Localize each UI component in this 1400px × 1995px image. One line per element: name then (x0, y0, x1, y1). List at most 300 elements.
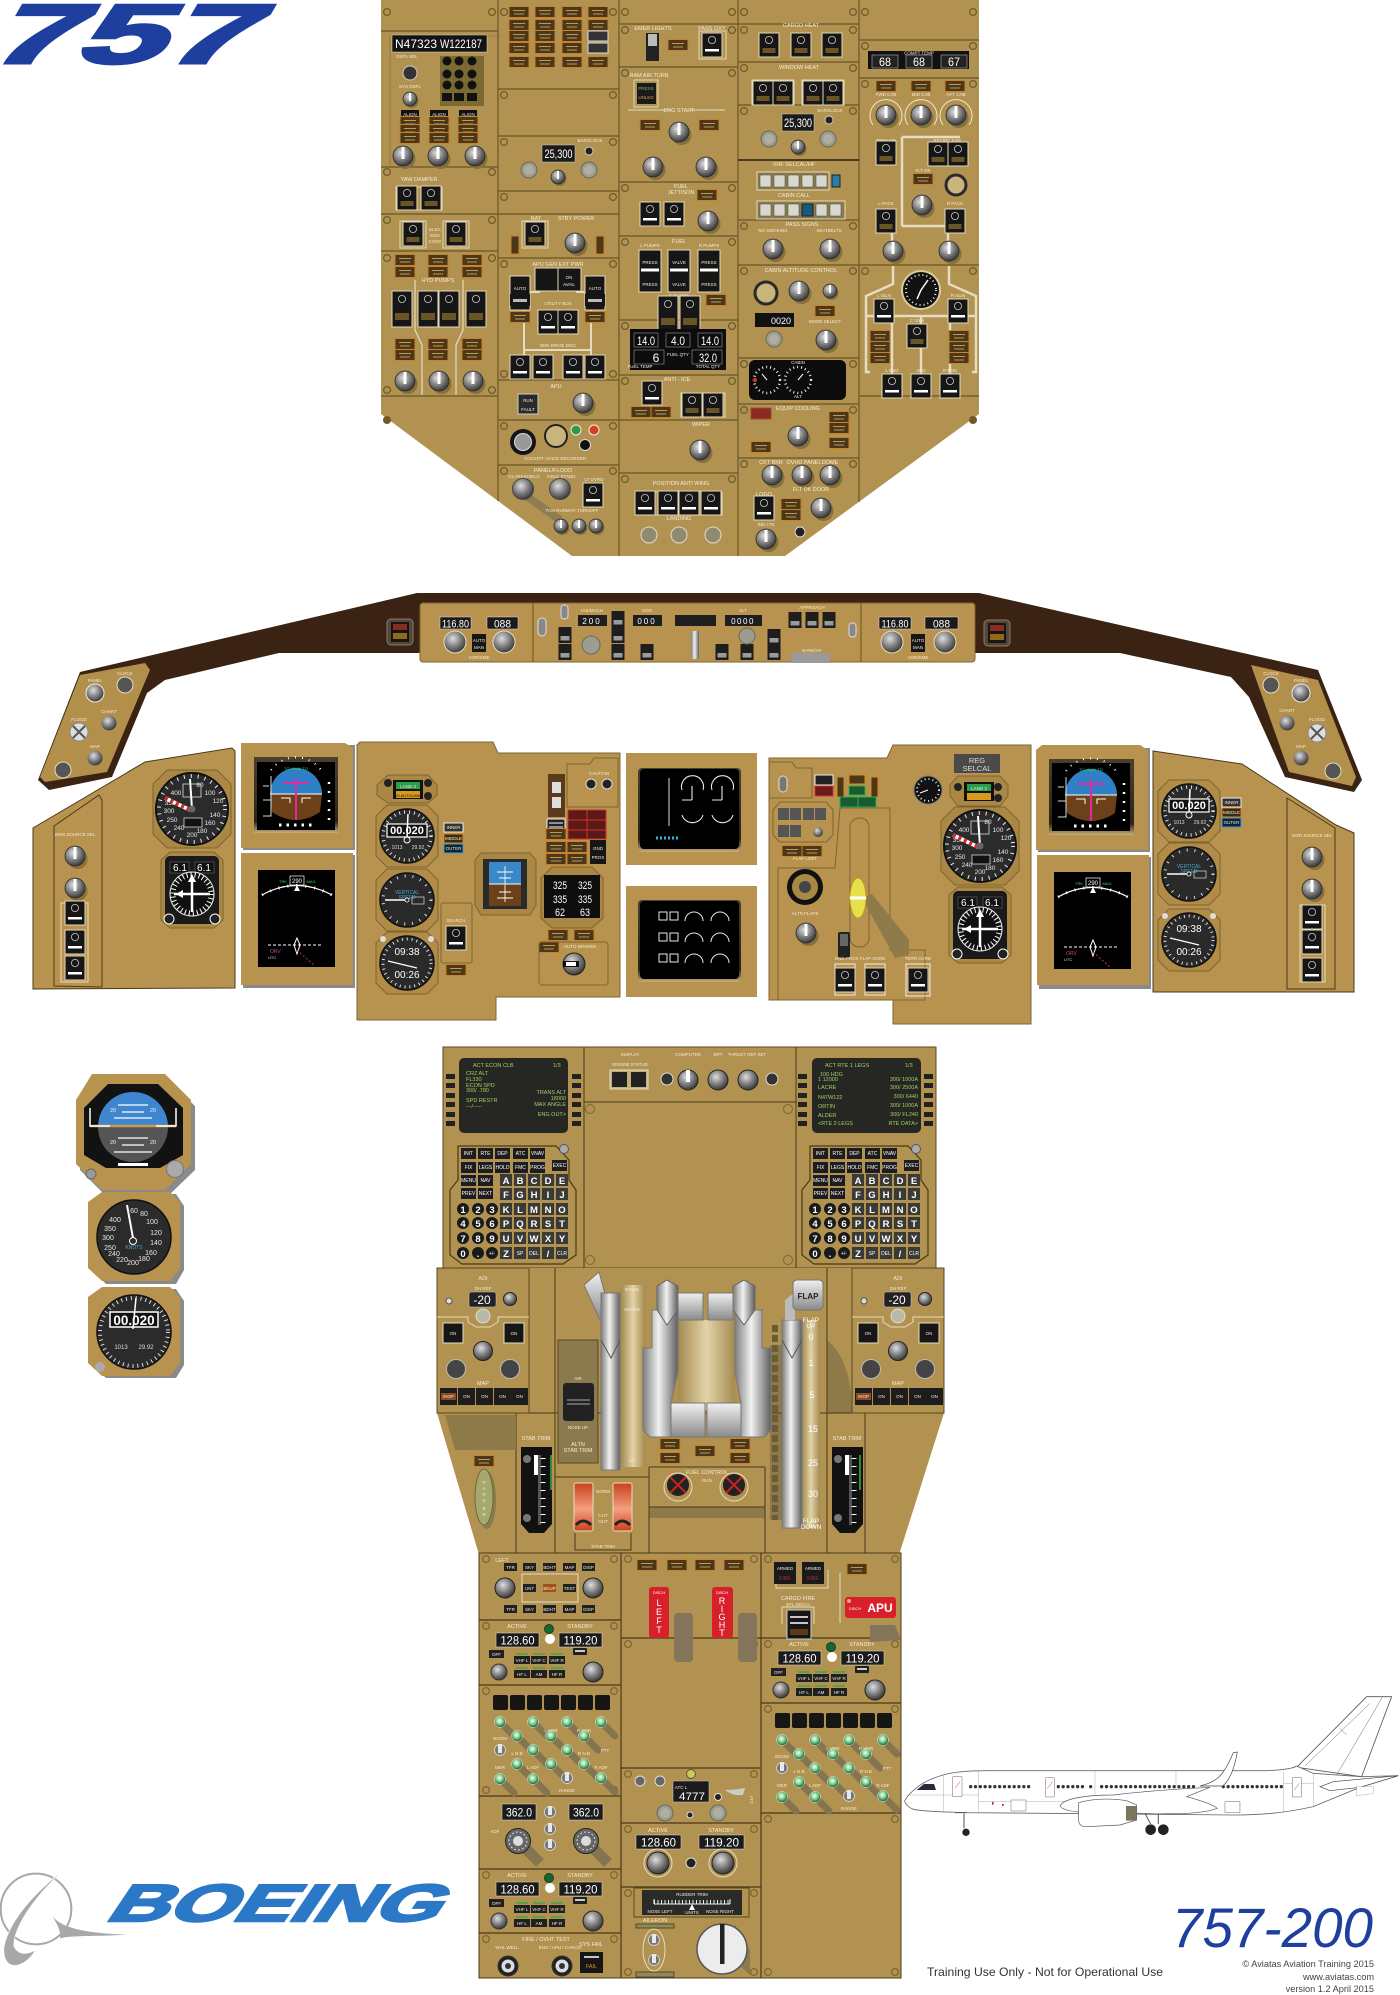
flap lever: 25 (808, 1458, 818, 1468)
panel flood: GLARESHIELD (508, 474, 541, 479)
rudder trim knob (697, 1924, 750, 1975)
engine fire handles: L (656, 1598, 662, 1608)
left EFIS control panel: MAP (477, 1381, 489, 1387)
EFIS selector panel (495, 1558, 603, 1613)
passenger signs: PASS SIGNS (786, 222, 819, 228)
duct pressure and bleed: R ENG (943, 368, 958, 373)
marker beacon lights: MIDDLE (1223, 810, 1240, 815)
autoland status: NO AUTOLAND (394, 793, 422, 798)
passenger signs: NO SMOKING (758, 228, 788, 233)
left glareshield lighting panel: FLOOD (71, 717, 87, 722)
electrical buses (510, 262, 605, 379)
center VHF panel: STANDBY (708, 1828, 734, 1834)
caution and warning cluster (546, 758, 618, 864)
standby airspeed indicator: 240 (108, 1251, 120, 1258)
right CDU screen: N47W122 (818, 1095, 842, 1101)
EICAS engine indicators: 335 (578, 894, 592, 906)
mode buttons: BANK/AP (802, 648, 822, 653)
hydraulics: HYD PUMPS (422, 278, 455, 284)
right CDU screen: 300/ 6440 (894, 1094, 918, 1100)
caution and warning cluster: CAUTION (589, 771, 609, 776)
display and computer selectors (610, 1052, 778, 1090)
exterior lights: POSITION ANTI WING (653, 481, 709, 487)
left CDU keypad: 6 (489, 1219, 495, 1230)
left CDU keypad: HOLD (496, 1165, 510, 1171)
left CDU keypad: C (531, 1176, 538, 1187)
right glareshield lighting panel (1251, 665, 1356, 786)
EFIS selector panel: MAP (565, 1607, 574, 1612)
transponder panel (635, 1770, 754, 1821)
fuel quantity display: 6 (653, 351, 660, 365)
cabin gauges (749, 360, 846, 400)
caution and warning cluster: PROX (592, 855, 604, 860)
left CDU keypad: EXEC (553, 1163, 567, 1169)
altitude display left: BAROLOCK (577, 138, 603, 143)
right glareshield lighting panel: CLOCK (1263, 671, 1279, 676)
standby airspeed indicator: 60 (130, 1208, 138, 1215)
left CDU keypad: PREV (462, 1191, 476, 1197)
ram air turbine (629, 73, 669, 107)
compartment temperature: 67 (948, 55, 960, 69)
EICAS engine indicators: 335 (553, 894, 567, 906)
VOR DME right (879, 617, 958, 660)
panel: captain outboard (33, 748, 235, 989)
communication radio 2 (489, 1873, 603, 1931)
fuel quantity display: 14.0 (637, 334, 655, 348)
VOR DME right: 116.80 (882, 618, 908, 630)
air conditioning: R PACK (947, 201, 963, 206)
left CDU keypad: INIT (464, 1151, 473, 1157)
left CDU screen: 18000 (551, 1096, 566, 1102)
APU fire handle: APU (867, 1601, 893, 1615)
engine fire handles: F (656, 1616, 662, 1626)
left glareshield lighting panel: CLOCK (117, 671, 133, 676)
left CDU keypad: NAV (481, 1178, 491, 1184)
stabilizer trim cutout levers: NORM (596, 1489, 610, 1494)
engine fire handles: T (719, 1628, 725, 1638)
left CDU keypad: G (516, 1190, 524, 1201)
copyright block (1242, 1959, 1374, 1994)
left CDU screen: SPD RESTR (466, 1098, 498, 1104)
autoland status (377, 775, 437, 803)
fuel quantity display: 4.0 (671, 334, 685, 348)
standby altimeter: 29.92 (138, 1345, 154, 1351)
left CDU keypad: SP (517, 1251, 524, 1257)
fuel jettison (640, 184, 720, 234)
left CDU screen: CRZ ALT (466, 1071, 489, 1077)
cargo fire armed: ARMED (805, 1566, 822, 1571)
window heat: WINDOW HEAT (779, 65, 820, 71)
left CDU keypad: W (530, 1234, 539, 1245)
EICAS upper display (626, 753, 757, 865)
left CDU keypad: 7 (460, 1234, 466, 1245)
right CDU screen: ACT RTE 1 LEGS (825, 1063, 869, 1069)
standby attitude indicator: 20 (110, 1108, 116, 1114)
ADF panel: 362.0 (573, 1806, 599, 1820)
EFIS selector panel: TFR (506, 1565, 516, 1570)
VOR DME right: AUTO (912, 638, 925, 643)
left CDU keypad: 9 (489, 1234, 495, 1245)
autobrakes (539, 930, 608, 985)
overhead lighting: LOGO (756, 492, 773, 498)
air conditioning: AFT CAB (947, 92, 965, 97)
left EFIS control panel: DH REF (475, 1286, 492, 1291)
stabilizer trim cutout levers: CUT (598, 1513, 608, 1518)
engine fire handles: G (718, 1612, 726, 1622)
left CDU screen: ---/----- (466, 1104, 482, 1110)
left CDU keypad: CLR (557, 1251, 567, 1257)
engine fire handles: T (656, 1625, 662, 1635)
left CDU keypad: T (559, 1219, 565, 1230)
EFIS selector panel: MAP (565, 1565, 574, 1570)
marker beacon lights: OUTER (446, 846, 462, 851)
left CDU keypad: ATC (516, 1151, 526, 1157)
autoland status (950, 776, 1008, 806)
aileron trim (636, 1918, 674, 1977)
marker beacon lights: MIDDLE (445, 836, 462, 841)
display and computer selectors: THRUST REF SET (728, 1052, 766, 1057)
left CDU keypad: RTE (481, 1151, 491, 1157)
transponder panel: ATC (749, 1796, 754, 1805)
cabin altitude control: CABIN ALTITUDE CONTROL (765, 268, 837, 274)
fuel pumps: FUEL (672, 239, 686, 245)
park brake: P (482, 1480, 486, 1485)
left CDU keypad: PROG (530, 1165, 545, 1171)
overhead lighting: OVHD PANEL (786, 460, 822, 466)
standby power (511, 216, 604, 256)
panel: CDU section (443, 1047, 936, 1268)
EFIS selector panel: UNT (525, 1586, 534, 1591)
speedbrake lever: DOWN (625, 1287, 639, 1292)
captain PFD panel (241, 743, 355, 850)
fire and overheat test: SYS FAIL (579, 1942, 603, 1948)
air conditioning: TRIM AIR (876, 138, 896, 143)
APU control: RUN (523, 398, 533, 403)
right EFIS control panel (852, 1268, 944, 1413)
right glareshield lighting panel: CHART (1279, 708, 1295, 713)
registration plate: REG (969, 756, 985, 765)
cargo fire armed: ARMED (777, 1566, 794, 1571)
right CDU keypad (798, 1074, 933, 1264)
cargo fire armed: FIRE (779, 1576, 791, 1582)
mode buttons: APPROACH (799, 605, 825, 610)
stabilizer trim cutout levers: STAB TRIM (591, 1544, 615, 1549)
left CDU keypad: E (559, 1176, 565, 1187)
ram air turbine: RAM AIR TURB (629, 73, 669, 79)
right CDU screen: 100 HDG (820, 1072, 843, 1078)
standby airspeed indicator (88, 1192, 184, 1284)
EICAS engine indicators: 63 (580, 907, 590, 919)
equipment cooling (751, 406, 849, 452)
master warning lights left (387, 619, 413, 645)
mode control panel (420, 603, 975, 663)
electrical buses: AUTO (514, 286, 527, 291)
EFIS selector panel: DISP (583, 1565, 594, 1570)
APU fire handle: DISCH (849, 1606, 861, 1611)
alternate stabilizer trim: STAB TRIM (564, 1448, 593, 1454)
air conditioning: RECIRC FAN (933, 138, 961, 143)
left EFIS control panel: ON (499, 1394, 506, 1399)
left glareshield lighting panel: CHART (101, 709, 117, 714)
captain source selectors: WXR SOURCE SEL (55, 832, 96, 837)
altitude display right (761, 108, 843, 156)
cockpit voice recorder: COCKPIT VOICE RECORDER (524, 456, 587, 461)
center VHF panel (636, 1828, 744, 1877)
speed, heading and altitude windows: ALT (739, 608, 747, 613)
left EFIS control panel: ON (463, 1394, 470, 1399)
left CDU keypad: A (503, 1176, 510, 1187)
right CDU screen: 300/ 1000A (890, 1077, 918, 1083)
fuel control switches: FUEL CONTROL (686, 1470, 728, 1476)
park brake (474, 1456, 496, 1529)
brake pressure gauge (914, 776, 942, 804)
rudder trim indicator: UNITS (685, 1910, 699, 1915)
left CDU keypad: 1 (460, 1205, 466, 1216)
cargo fire armed: CARGO FIRE (781, 1596, 815, 1602)
left EFIS control panel: ON (516, 1394, 523, 1399)
cargo fire armed (774, 1562, 867, 1639)
ADF panel: ADF (490, 1829, 500, 1834)
air conditioning: L PACK (878, 201, 894, 206)
left CDU screen: 1/3 (553, 1063, 561, 1069)
annunciator grid (509, 6, 608, 68)
VOR DME right: 088 (933, 618, 950, 630)
center VHF panel: 128.60 (641, 1836, 676, 1850)
rudder trim indicator (634, 1888, 749, 1917)
first officer source selectors: WXR SOURCE SEL (1292, 833, 1333, 838)
cockpit voice recorder (510, 425, 599, 461)
left CDU keypad: S (545, 1219, 551, 1230)
IRS display: N47323 (395, 37, 437, 51)
right CDU screen: 300/ 1000A (890, 1103, 918, 1109)
left CDU keypad: B (517, 1176, 524, 1187)
speed, heading and altitude windows: HDG (642, 608, 652, 613)
fuel quantity display: TOTAL QTY (696, 364, 720, 369)
flap position and alternate flaps (787, 856, 850, 958)
IRS align columns (393, 110, 488, 169)
display and computer selectors: DISPLAY (621, 1052, 639, 1057)
left CDU keypad: Y (559, 1234, 566, 1245)
right CDU screen: ORTIN (818, 1104, 835, 1110)
left CDU keypad: U (503, 1234, 510, 1245)
captain airspeed indicator (153, 770, 231, 848)
autoland status: LAND 3 (971, 786, 987, 791)
fuel pumps: R PUMPS (699, 243, 719, 248)
panel flood: PANEL/FLOOD (534, 468, 572, 474)
EFIS selector panel: SKY (525, 1565, 534, 1570)
IRS keypad and selectors (396, 54, 484, 108)
left EFIS control panel: -20 (473, 1293, 491, 1307)
autoland status: LAND 3 (400, 784, 416, 789)
VOR DME left: 088 (494, 618, 511, 630)
air conditioning: FLT DK (915, 168, 931, 173)
standby airspeed indicator: 220 (116, 1257, 128, 1264)
electrical buses: UTILITY BUS (544, 301, 572, 306)
marker beacon lights (444, 823, 463, 853)
engine start: ENG START (664, 108, 695, 114)
engine fire handles: R (719, 1596, 726, 1606)
passenger signs (758, 222, 842, 262)
speed, heading and altitude windows: 200 (582, 617, 602, 626)
speed, heading and altitude windows: 0000 (731, 617, 755, 626)
speed, heading and altitude windows: IAS/MACH (581, 608, 603, 613)
auxiliary panel: SEARCH (447, 918, 465, 923)
yaw damper (396, 177, 442, 210)
captain RMI (161, 852, 223, 928)
compartment temperature (868, 50, 969, 69)
flap lever: FLAP (803, 1317, 819, 1324)
speedbrake lever: ARMED (624, 1307, 641, 1312)
compartment temperature: COMPT TEMP (904, 50, 934, 56)
engine fire handles: H (719, 1620, 725, 1630)
standby altimeter: 1013 (114, 1345, 128, 1351)
overhead lighting: CKT BKR (759, 460, 783, 466)
air conditioning: FWD CAB (876, 92, 896, 97)
fire and overheat test (495, 1937, 603, 1976)
VOR DME left: 116.80 (442, 618, 469, 630)
overhead lighting: FLT DK DOOR (793, 487, 829, 493)
fuel control switches: RUN (702, 1478, 712, 1483)
IRS keypad and selectors: DSPL SEL (396, 54, 418, 59)
EFIS selector panel: SKY (525, 1607, 534, 1612)
left CDU keypad: N (545, 1205, 552, 1216)
rudder trim indicator: RUDDER TRIM (676, 1892, 708, 1897)
left CDU keypad: 5 (475, 1219, 481, 1230)
fuel quantity display: FUEL QTY (667, 352, 689, 357)
flap lever: 5 (809, 1390, 815, 1400)
fuel valve annunciators (660, 1438, 750, 1464)
left CDU screen: TRANS ALT (536, 1090, 567, 1096)
cargo fire armed: FIRE (807, 1576, 819, 1582)
altitude display left (521, 138, 603, 186)
left CDU keypad: 2 (475, 1205, 481, 1216)
exterior lights (635, 481, 722, 543)
engine fire handles (649, 1587, 757, 1662)
flap lever: UP (806, 1323, 816, 1330)
VOR DME left: VOR/DME (468, 655, 490, 660)
right CDU screen: LACRE (818, 1085, 837, 1091)
electrical buses: GEN DRIVE DISC (540, 343, 577, 348)
left EFIS control panel (437, 1268, 529, 1413)
park brake: A (482, 1486, 486, 1491)
standby airspeed indicator: 100 (146, 1219, 158, 1226)
VOR DME right: MAN (913, 645, 923, 650)
left CDU keypad: FMC (515, 1165, 526, 1171)
cargo heat: CARGO HEAT (783, 23, 820, 29)
fire annunciators (637, 1560, 744, 1570)
park brake: K (482, 1498, 486, 1503)
standby altimeter: 00.020 (113, 1313, 155, 1328)
equipment cooling: EQUIP COOLING (776, 406, 820, 412)
standby airspeed indicator: 120 (150, 1230, 162, 1237)
flap lever: 15 (808, 1424, 818, 1434)
display and computer selectors: BRT (714, 1052, 723, 1057)
speedbrake lever: UP (629, 1458, 635, 1463)
copyright block: © Aviatas Aviation Training 2015 (1242, 1959, 1374, 1969)
communication radio 3 (771, 1642, 885, 1700)
fuel pumps (639, 239, 726, 332)
fuel pumps: VALVE (672, 260, 686, 265)
APU control (518, 384, 596, 416)
standby altimeter (88, 1287, 184, 1378)
cabin altitude control: 0020 (771, 316, 791, 326)
EFIS selector panel: BDHT (543, 1607, 556, 1612)
stabilizer trim left (521, 1436, 552, 1533)
landing gear lever (778, 808, 925, 1000)
display and computer selectors: ENGINE STATUS (612, 1062, 648, 1067)
left CDU screen: ENG OUT> (538, 1112, 566, 1118)
left CDU keypad: O (558, 1205, 566, 1216)
cabin gauges: ALT (794, 394, 802, 399)
fuel pumps: VALVE (672, 282, 686, 287)
IRS keypad and selectors: SYS DSPL (399, 84, 421, 89)
electrical buses: APU GEN EXT PWR (532, 262, 584, 268)
panel: center left instruments (357, 742, 620, 1020)
ADF panel (490, 1804, 608, 1863)
cabin gauges: CABIN (791, 360, 805, 365)
left CDU keypad: FIX (465, 1165, 473, 1171)
stabilizer trim cutout levers: OUT (598, 1519, 608, 1524)
rudder trim indicator: NOSE LEFT (647, 1909, 673, 1914)
standby power: RAT (531, 216, 542, 222)
yaw damper: YAW DAMPER (401, 177, 438, 183)
right CDU screen: <RTE 2 LEGS (818, 1121, 853, 1127)
rudder trim indicator: NOSE RIGHT (706, 1909, 734, 1914)
right glareshield lighting panel: FLOOD (1309, 717, 1325, 722)
right glareshield lighting panel: MAP (1296, 744, 1306, 749)
duct pressure and bleed: C ISLN (910, 318, 924, 323)
cabin altitude control (755, 268, 841, 353)
panel flood: LT OVRD (584, 477, 604, 482)
electrical buses: AUTO (589, 286, 602, 291)
ground proximity overrides (835, 956, 932, 996)
Boeing wordmark: BOEING (96, 1875, 467, 1933)
transponder panel: 4777 (679, 1791, 705, 1803)
center VHF panel: ACTIVE (648, 1828, 668, 1834)
right CDU screen: 1 12000 (818, 1077, 838, 1083)
left CDU keypad: R (531, 1219, 538, 1230)
audio control panel right (775, 1713, 897, 1811)
standby airspeed indicator: 350 (104, 1226, 116, 1233)
left CDU screen: ECON SPD (466, 1083, 495, 1089)
thrust levers (643, 1280, 771, 1437)
call lights: VHF SELCAL/HF (773, 162, 816, 168)
fuel jettison: JETTISON (668, 190, 694, 196)
emergency lights and pass oxy: EMER LIGHTS (634, 26, 672, 32)
left CDU keypad: 8 (475, 1234, 481, 1245)
ADF panel: 362.0 (506, 1806, 532, 1820)
standby airspeed indicator: 140 (150, 1240, 162, 1247)
fuel quantity display (627, 329, 726, 370)
left CDU keypad (446, 1074, 581, 1264)
display and computer selectors: COMPUTER (675, 1052, 702, 1057)
altitude display left: 25,300 (544, 147, 573, 161)
EFIS selector panel: TEST (564, 1586, 575, 1591)
left CDU screen: MAX ANGLE (534, 1102, 566, 1108)
left CDU keypad: +/- (489, 1251, 495, 1257)
left CDU keypad: / (547, 1249, 550, 1260)
glareshield (38, 593, 1362, 792)
left CDU screen: 300/ .780 (466, 1088, 489, 1094)
ground proximity overrides: GND PROX FLAP OVRD (835, 956, 886, 961)
IRS align columns: ALIGN (432, 112, 446, 117)
standby attitude indicator: 20 (110, 1140, 116, 1146)
right CDU screen: 1/3 (905, 1063, 913, 1069)
left CDU keypad: Z (503, 1249, 509, 1260)
left EFIS control panel: INOP (443, 1394, 454, 1399)
left CDU keypad: K (503, 1205, 510, 1216)
EICAS engine indicators (541, 867, 603, 928)
